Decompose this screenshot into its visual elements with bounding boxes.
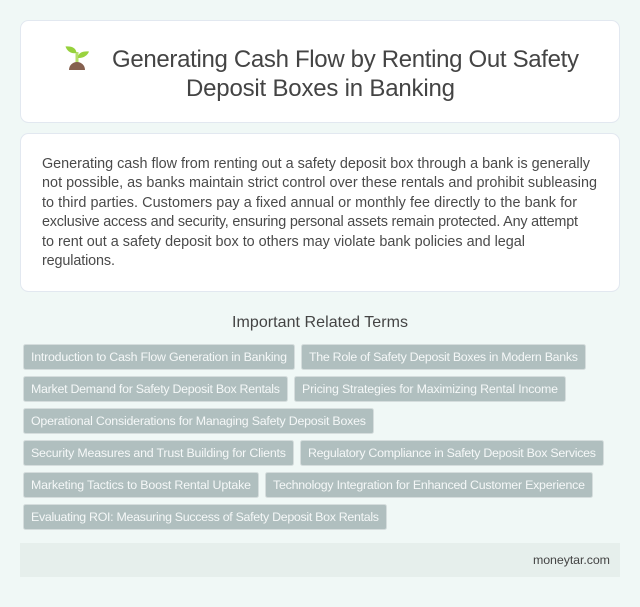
- chip: [294, 376, 566, 402]
- description text: not possible, as banks maintain strict control over these rentals and prohibit subleasing: [42, 175, 597, 191]
- description text: to rent out a safety deposit box to others may violate bank policies and legal: [42, 234, 525, 250]
- panel: description: [20, 134, 620, 292]
- chip: [24, 472, 258, 498]
- title: Deposit Boxes in Banking: [186, 75, 455, 102]
- description text: [42, 156, 597, 269]
- chip: [24, 376, 288, 402]
- chip: Security Measures and Trust Building for Clients: [31, 446, 286, 460]
- title: [112, 46, 579, 102]
- chip: [266, 472, 592, 498]
- description text: to third parties. Customers pay a fixed annual or monthly fee directly to the bank for: [42, 195, 577, 211]
- chip: [24, 408, 374, 434]
- chip: [24, 504, 386, 530]
- chip: Introduction to Cash Flow Generation in Banking: [31, 350, 287, 364]
- description text: exclusive access and security, ensuring personal assets remain protected. Any attempt: [42, 214, 578, 230]
- chip: Marketing Tactics to Boost Rental Uptake: [31, 478, 251, 492]
- chip: [24, 440, 294, 466]
- related terms chips: [24, 344, 604, 530]
- chip: Evaluating ROI: Measuring Success of Safety Deposit Box Rentals: [31, 510, 379, 524]
- description text: regulations.: [42, 253, 115, 269]
- chip: [302, 344, 586, 370]
- chip: The Role of Safety Deposit Boxes in Modern Banks: [309, 350, 578, 364]
- chip: Market Demand for Safety Deposit Box Rentals: [31, 382, 280, 396]
- chip: [24, 344, 294, 370]
- chip: Operational Considerations for Managing Safety Deposit Boxes: [31, 414, 366, 428]
- header panel: [20, 20, 620, 122]
- description text: Generating cash flow from renting out a safety deposit box through a bank is generally: [42, 156, 591, 172]
- chip: Technology Integration for Enhanced Customer Experience: [273, 478, 585, 492]
- heading: important related terms: Important Related Terms: [232, 314, 408, 331]
- chip: Regulatory Compliance in Safety Deposit Box Services: [308, 446, 596, 460]
- icon: seedling: [66, 46, 89, 70]
- footer source text: moneytar.com: [533, 553, 610, 567]
- title: Generating Cash Flow by Renting Out Safety: [112, 46, 579, 73]
- chip: Pricing Strategies for Maximizing Rental Income: [302, 382, 558, 396]
- chip: [300, 440, 604, 466]
- footer: [20, 543, 620, 577]
